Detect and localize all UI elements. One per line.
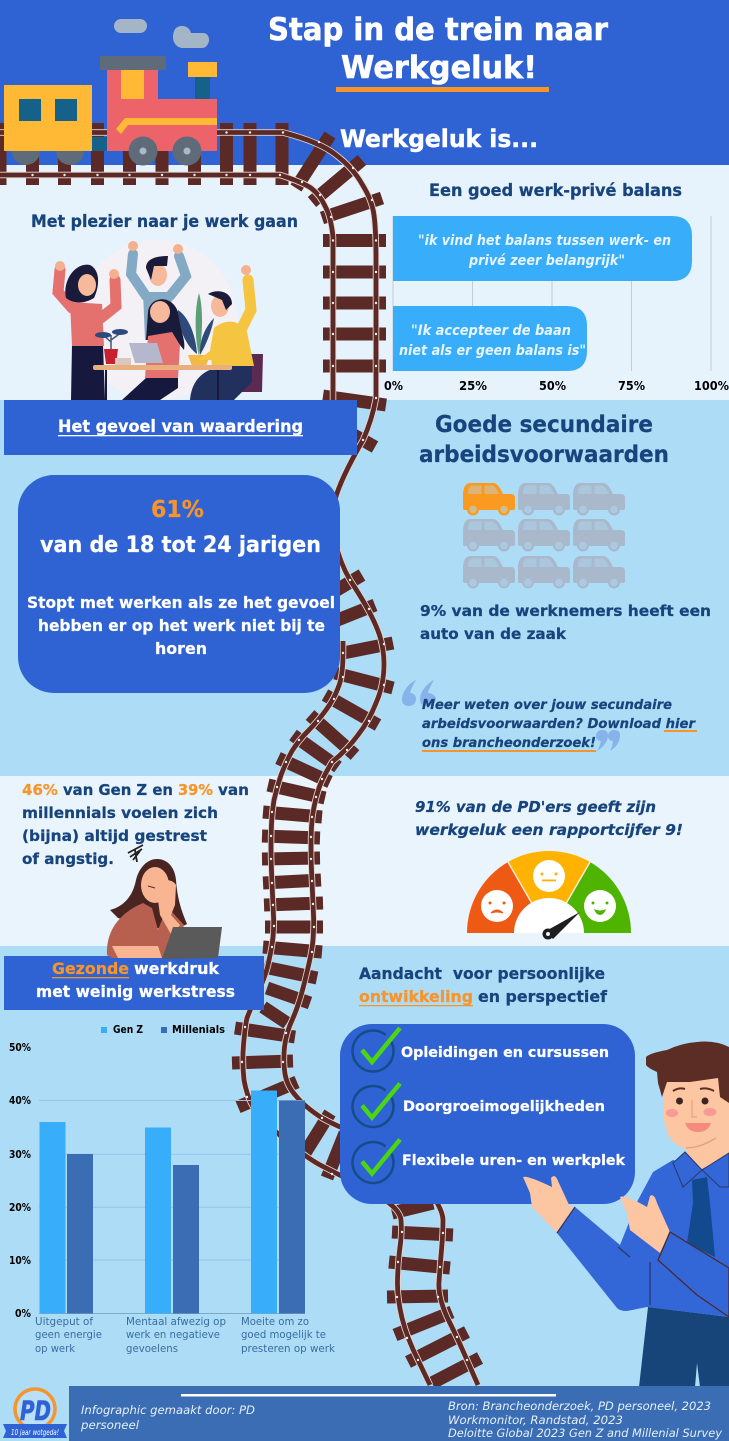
gauge <box>467 851 631 939</box>
y axis labels: 10% <box>9 1255 31 1267</box>
bar: werk-privé belangrijk: privé zeer belangrijk" <box>468 253 625 269</box>
heading: ontwikkeling: en perspectief <box>478 987 608 1006</box>
axis labels <box>384 379 729 393</box>
bar chart: balans <box>384 216 729 393</box>
axis labels: 25% <box>459 379 487 393</box>
large plant <box>178 293 214 366</box>
stress statistic: of angstig. <box>22 850 114 868</box>
panel: secundaire arbeidsvoorwaarden <box>402 412 711 752</box>
bar: baan niet accepteren <box>393 306 587 371</box>
heading bar: gezonde werkdruk <box>4 956 264 1010</box>
heading bar: waardering: Het gevoel van waardering <box>58 417 303 436</box>
callout: 61%: hebben er op het werk niet bij te <box>38 616 325 635</box>
man: right sleeve <box>658 1232 729 1317</box>
man: trousers <box>639 1307 729 1387</box>
man: neck and face <box>663 1078 729 1170</box>
y axis labels: 0% <box>15 1308 31 1320</box>
check item: flexibel: Flexibele uren- en werkplek <box>402 1153 625 1169</box>
stress statistic: van Gen Z en <box>63 781 173 799</box>
stress statistic <box>22 781 249 868</box>
axis labels: 75% <box>618 379 645 393</box>
y axis labels <box>9 1042 31 1320</box>
table <box>93 365 232 400</box>
man right <box>190 265 263 400</box>
quote text: ons brancheonderzoek! <box>422 736 596 751</box>
logo: PD: 10 jaar wotgeda! <box>11 1428 59 1437</box>
heading: ontwikkeling: ontwikkeling <box>359 987 473 1006</box>
check item: doorgroei <box>352 1084 605 1127</box>
stat: auto van de zaak: 9% van de werknemers heeft een <box>420 602 711 620</box>
category labels: Uitgeput of <box>35 1316 93 1328</box>
heading: ontwikkeling: Aandacht voor persoonlijke <box>359 964 605 983</box>
footer: sources: Bron: Brancheonderzoek, PD personeel, 2023 <box>448 1399 711 1413</box>
footer: sources: Deloitte Global 2023 Gen Z and Millenial Survey <box>448 1426 722 1440</box>
heading: balans: Een goed werk-privé balans <box>429 181 682 200</box>
panel: rapportcijfer <box>415 798 683 939</box>
check item: flexibel <box>352 1140 625 1183</box>
bars <box>40 1090 305 1314</box>
train: locomotive <box>100 56 217 166</box>
man: collar <box>673 1152 729 1187</box>
y axis labels: 50% <box>9 1042 31 1054</box>
heading: ontwikkeling <box>359 964 608 1006</box>
chart legend: Gen Z <box>113 1024 143 1036</box>
panel: stress <box>22 781 249 868</box>
train: wagon wheels <box>12 137 84 165</box>
man: shirt <box>557 1153 729 1317</box>
heading bar: gezonde werkdruk: met weinig werkstress <box>36 982 235 1001</box>
illustration: pointing man <box>523 1042 729 1387</box>
rapportcijfer text <box>415 798 683 839</box>
callout: 61%: van de 18 tot 24 jarigen <box>40 533 321 558</box>
stress statistic: millennials voelen zich <box>22 804 218 822</box>
rapportcijfer text: 91% van de PD'ers geeft zijn <box>415 798 656 816</box>
bar: baan niet accepteren: "Ik accepteer de baan <box>411 323 571 339</box>
axis labels: 0% <box>384 379 403 393</box>
check item: opleidingen: Opleidingen en cursussen <box>401 1045 609 1061</box>
train: coupling <box>92 137 107 151</box>
quote text: Meer weten over jouw secundaire <box>422 698 672 713</box>
heading: secundaire: Goede secundaire <box>435 412 653 438</box>
subtitle: Werkgeluk is... <box>340 125 538 153</box>
heading bar: waardering <box>4 400 357 455</box>
title: Werkgeluk! <box>341 50 537 86</box>
steel rails <box>0 132 478 1385</box>
illustration: cheering team <box>55 240 263 400</box>
man: left hand <box>523 1176 575 1233</box>
panel: werk-privé balans <box>384 181 729 393</box>
category labels: Mentaal afwezig op <box>126 1316 226 1328</box>
man: arm lines <box>557 1207 650 1305</box>
footer: maker <box>80 1403 255 1432</box>
heading bar: gezonde werkdruk: werkdruk <box>134 959 219 978</box>
quote text <box>422 698 697 752</box>
man back <box>128 241 186 340</box>
bar: baan niet accepteren: niet als er geen balans is" <box>399 343 586 359</box>
laptop <box>129 343 163 363</box>
heading: secundaire <box>419 412 669 468</box>
pictogram: nine cars <box>463 483 625 588</box>
footer: sources: Workmonitor, Randstad, 2023 <box>448 1413 623 1427</box>
heading: secundaire: arbeidsvoorwaarden <box>419 442 669 468</box>
check item: doorgroei: Doorgroeimogelijkheden <box>403 1099 605 1115</box>
stress statistic: 39% <box>178 781 213 799</box>
bar: werk-privé belangrijk: "ik vind het balans tussen werk- en <box>418 233 671 249</box>
category labels: op werk <box>35 1343 76 1355</box>
stat: auto van de zaak <box>420 602 711 643</box>
small plant <box>95 329 131 365</box>
bar: werk-privé belangrijk <box>393 216 692 281</box>
rapportcijfer text: werkgeluk een rapportcijfer 9! <box>415 821 683 839</box>
footer <box>69 1386 729 1441</box>
footer: sources <box>448 1399 722 1440</box>
logo: PD <box>3 1389 67 1438</box>
man: hair <box>646 1042 729 1103</box>
y axis labels: 30% <box>9 1149 31 1161</box>
bar chart: stress Gen Z and millennials <box>9 1024 336 1355</box>
train: wagon <box>4 85 92 151</box>
man: face details <box>666 1088 716 1148</box>
stress statistic: 46% <box>22 781 58 799</box>
heading bar: gezonde werkdruk: Gezonde <box>52 959 129 978</box>
rail bolts <box>32 132 467 1360</box>
category labels: geen energie <box>35 1329 102 1341</box>
panel: plezier <box>31 212 298 400</box>
callout: 61%: 61% <box>151 497 204 523</box>
footer: maker: Infographic gemaakt door: PD <box>81 1403 255 1417</box>
man: right hand <box>620 1195 670 1253</box>
illustration: stressed woman <box>107 845 222 959</box>
heading: plezier: Met plezier naar je werk gaan <box>31 212 298 231</box>
rail highlights <box>0 132 478 1385</box>
axis labels: 50% <box>539 379 566 393</box>
title: Stap in de trein naar <box>268 12 609 48</box>
category labels: gevoelens <box>126 1343 178 1355</box>
callout: 61% <box>18 475 340 693</box>
category labels: goed mogelijk te <box>241 1329 326 1341</box>
man: tie <box>687 1177 715 1257</box>
title <box>268 12 609 92</box>
y axis labels: 20% <box>9 1202 31 1214</box>
category labels: Moeite om zo <box>241 1316 309 1328</box>
category labels: presteren op werk <box>241 1343 336 1355</box>
woman left <box>55 261 119 400</box>
stress statistic: (bijna) altijd gestrest <box>22 827 208 845</box>
quote text: arbeidsvoorwaarden? Download hier <box>422 717 697 732</box>
y axis labels: 40% <box>9 1095 31 1107</box>
callout: 61%: horen <box>155 639 207 658</box>
category labels <box>35 1316 336 1355</box>
clouds <box>114 19 209 48</box>
logo: PD: PD <box>20 1396 51 1427</box>
checklist box <box>340 1024 635 1204</box>
train <box>4 56 217 166</box>
category labels: werk en negatieve <box>126 1329 220 1341</box>
chart legend <box>101 1024 225 1036</box>
footer: maker: personeel <box>80 1418 140 1432</box>
chart legend: Millenials <box>172 1024 225 1036</box>
railway track <box>0 123 480 1385</box>
callout: 61%: Stopt met werken als ze het gevoel <box>27 593 335 612</box>
stat: auto van de zaak: auto van de zaak <box>420 625 567 643</box>
panel: persoonlijke ontwikkeling <box>340 964 635 1204</box>
check item: opleidingen <box>352 1028 609 1072</box>
stress statistic: van <box>218 781 249 799</box>
woman centre <box>122 299 184 400</box>
quote marks <box>402 680 620 751</box>
track sleepers <box>0 123 480 1383</box>
